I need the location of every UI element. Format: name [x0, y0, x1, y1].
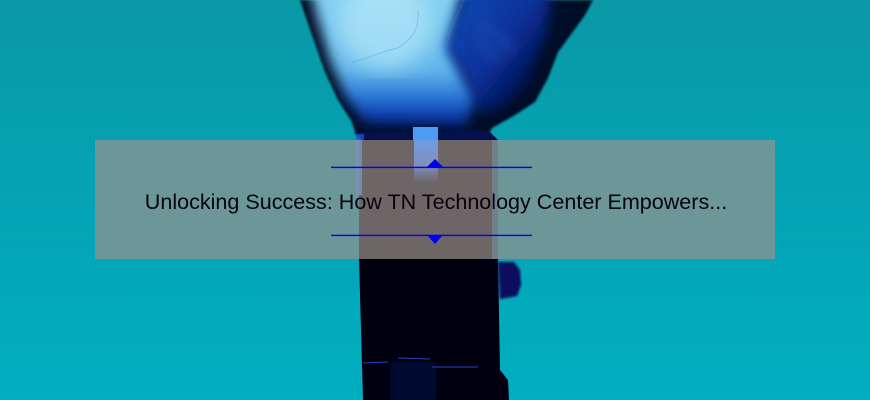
- translucent title panel: [95, 140, 775, 259]
- hand: [300, 0, 593, 135]
- title: Unlocking Success: How TN Technology Center Empowers...: [145, 189, 727, 214]
- wrist band: [355, 127, 498, 141]
- top divider with arrow: [331, 159, 532, 168]
- bottom divider with arrow: [331, 235, 532, 244]
- forearm: [359, 259, 521, 400]
